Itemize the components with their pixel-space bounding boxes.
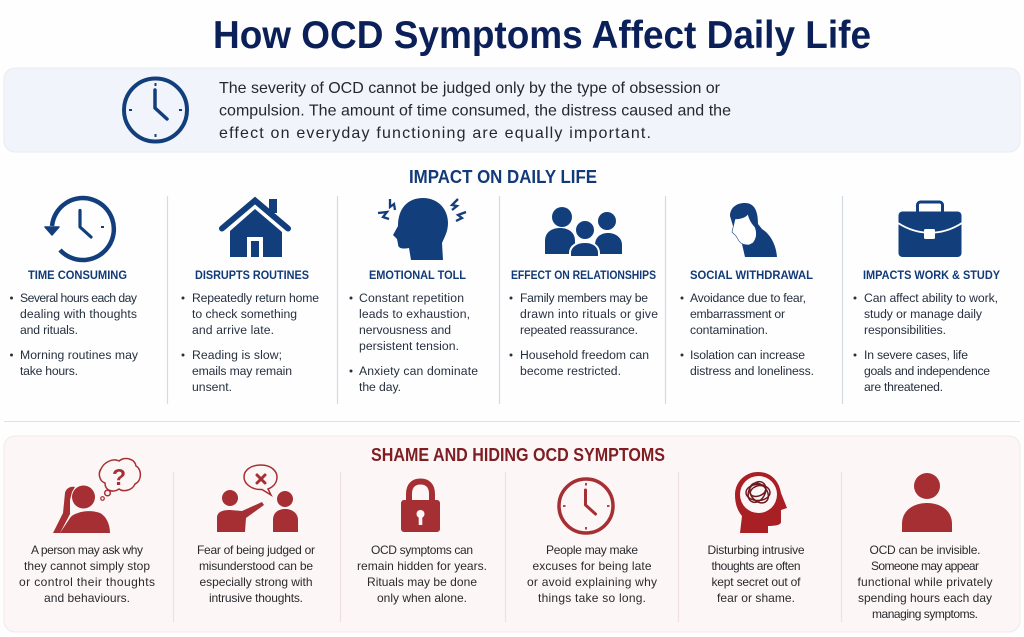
bullets: Reading is slow; xyxy=(192,348,282,362)
bullets: Can affect ability to work, xyxy=(864,291,998,305)
description: fear or shame. xyxy=(717,591,795,605)
description: managing symptoms. xyxy=(872,607,978,621)
bullets: emails may remain xyxy=(192,364,292,378)
bullets: Isolation can increase xyxy=(690,348,805,362)
column: disrupts routines xyxy=(182,199,319,394)
icon: head with tangled brain xyxy=(735,472,787,533)
description xyxy=(858,543,992,621)
heading: EMOTIONAL TOLL xyxy=(369,268,466,282)
bullets: Avoidance due to fear, xyxy=(690,291,806,305)
bullets: study or manage daily xyxy=(864,307,983,321)
description: kept secret out of xyxy=(712,575,801,589)
description: excuses for being late xyxy=(532,559,652,573)
bullets: responsibilities. xyxy=(864,323,946,337)
description xyxy=(357,543,487,605)
intro text: effect on everyday functioning are equally important. xyxy=(219,125,651,142)
bullets: Repeatedly return home xyxy=(192,291,319,305)
item: fear of judgment xyxy=(197,465,315,605)
bullets xyxy=(854,291,998,394)
item: excuses for lateness xyxy=(527,479,657,605)
bullets: repeated reassurance. xyxy=(520,323,638,337)
icon: people with speech bubble xyxy=(217,465,298,532)
item: intrusive thoughts xyxy=(708,472,805,605)
icon: clock xyxy=(124,78,187,142)
bullets: are threatened. xyxy=(864,380,943,394)
bullets: the day. xyxy=(359,380,401,394)
item: invisible OCD xyxy=(858,473,992,621)
icon: person xyxy=(902,473,952,532)
item: hidden for years xyxy=(357,482,487,605)
bullets: Household freedom can xyxy=(520,348,649,362)
icon: three people xyxy=(545,207,622,257)
heading: SOCIAL WITHDRAWAL xyxy=(690,268,813,282)
bullets: contamination. xyxy=(690,323,768,337)
bullets: Anxiety can dominate xyxy=(359,364,478,378)
description: Rituals may be done xyxy=(367,575,477,589)
bullets: unsent. xyxy=(192,380,232,394)
icon: briefcase xyxy=(898,202,962,257)
description: functional while privately xyxy=(858,575,992,589)
icon: clock xyxy=(559,479,613,533)
description: or avoid explaining why xyxy=(527,575,657,589)
description: Someone may appear xyxy=(871,559,979,573)
description: intrusive thoughts. xyxy=(209,591,303,605)
description: A person may ask why xyxy=(31,543,143,557)
bullets: to check something xyxy=(192,307,297,321)
bullets: embarrassment or xyxy=(690,307,785,321)
icon: person with question cloud: ? xyxy=(112,464,126,490)
description: OCD symptoms can xyxy=(371,543,473,557)
description: remain hidden for years. xyxy=(357,559,487,573)
bullets: become restricted. xyxy=(520,364,621,378)
bullets xyxy=(10,291,139,378)
bullets: Morning routines may xyxy=(20,348,139,362)
column: time consuming xyxy=(10,198,139,378)
description: thoughts are often xyxy=(712,559,800,573)
description: Fear of being judged or xyxy=(197,543,315,557)
item: asking why xyxy=(19,459,155,605)
icon: person with question cloud xyxy=(53,459,140,533)
bullets: Several hours each day xyxy=(20,291,138,305)
icon: head with lightning xyxy=(378,198,466,260)
bullets: and rituals. xyxy=(20,323,78,337)
bullets: persistent tension. xyxy=(359,339,459,353)
bullets: dealing with thoughts xyxy=(20,307,137,321)
column: impacts work and study xyxy=(854,202,1001,394)
column: effect on relationships xyxy=(510,207,658,378)
intro text: compulsion. The amount of time consumed, the distress caused and the xyxy=(219,102,731,120)
description xyxy=(19,543,155,605)
heading: shame and hiding OCD symptoms: SHAME AND HIDING OCD SYMPTOMS xyxy=(371,445,665,465)
icon: withdrawn person xyxy=(730,203,777,257)
description: things take so long. xyxy=(538,591,646,605)
bullets: In severe cases, life xyxy=(864,348,968,362)
description: only when alone. xyxy=(377,591,467,605)
bullets: nervousness and xyxy=(359,323,451,337)
heading: EFFECT ON RELATIONSHIPS xyxy=(511,268,656,282)
title: How OCD Symptoms Affect Daily Life xyxy=(213,14,871,57)
description xyxy=(527,543,657,605)
bullets: leads to exhaustion, xyxy=(359,307,470,321)
bullets xyxy=(350,291,478,394)
description: People may make xyxy=(546,543,638,557)
icon: padlock xyxy=(401,482,440,532)
bullets: and arrive late. xyxy=(192,323,274,337)
bullets: Constant repetition xyxy=(359,291,464,305)
bullets xyxy=(510,291,658,378)
column: emotional toll xyxy=(350,198,478,394)
intro text xyxy=(219,80,731,142)
intro text: The severity of OCD cannot be judged only by the type of obsession or xyxy=(219,80,721,97)
description: especially strong with xyxy=(200,575,312,589)
heading: impact on daily life: IMPACT ON DAILY LIFE xyxy=(409,166,597,187)
bullets: take hours. xyxy=(20,364,78,378)
panel: intro xyxy=(4,68,1020,152)
description: spending hours each day xyxy=(858,591,992,605)
bullets xyxy=(680,291,814,378)
description: or control their thoughts xyxy=(19,575,155,589)
bullets: distress and loneliness. xyxy=(690,364,814,378)
heading: TIME CONSUMING xyxy=(28,268,127,282)
description: misunderstood can be xyxy=(199,559,313,573)
heading: DISRUPTS ROUTINES xyxy=(195,268,309,282)
description: OCD can be invisible. xyxy=(870,543,980,557)
description: and behaviours. xyxy=(44,591,130,605)
description: they cannot simply stop xyxy=(24,559,150,573)
bullets: goals and independence xyxy=(864,364,990,378)
bullets: drawn into rituals or give xyxy=(520,307,658,321)
panel: shame and hiding xyxy=(4,436,1020,632)
description xyxy=(708,543,805,605)
icon: house xyxy=(222,199,288,257)
bullets: Family members may be xyxy=(520,291,648,305)
heading: IMPACTS WORK & STUDY xyxy=(863,268,1001,282)
icon: clock with back arrow xyxy=(45,198,114,260)
bullets xyxy=(182,291,319,394)
description: Disturbing intrusive xyxy=(708,543,805,557)
description xyxy=(197,543,315,605)
column: social withdrawal xyxy=(680,203,814,378)
